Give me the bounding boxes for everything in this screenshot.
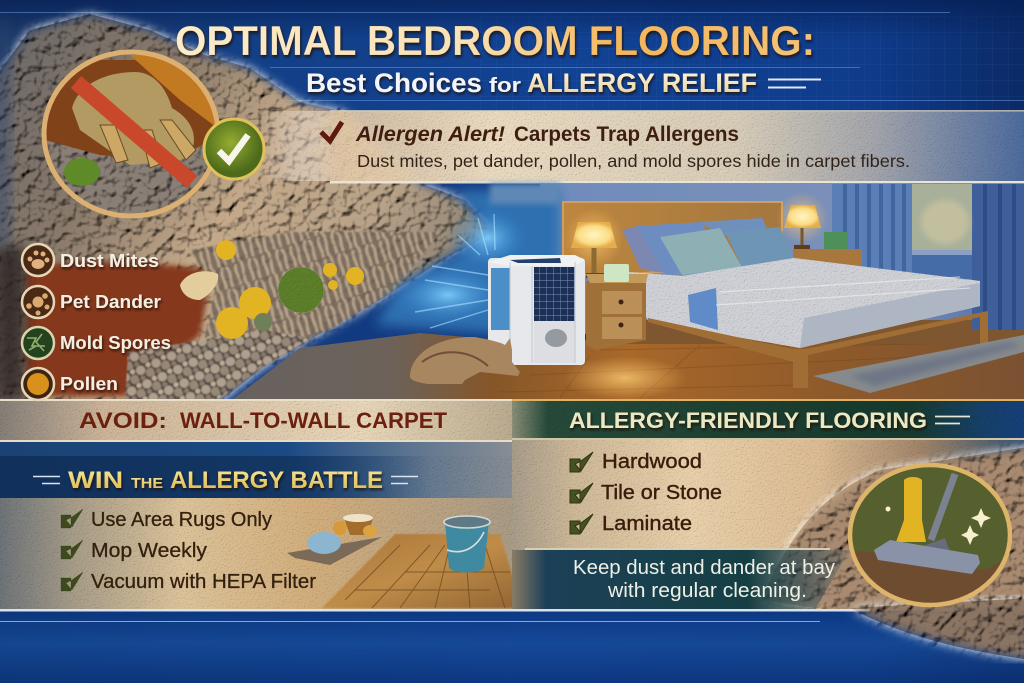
- checklist: cleaning tips: Vacuum with HEPA Filter: [91, 570, 316, 593]
- avoid text: AVOID:: [79, 408, 167, 433]
- alert heading: Allergen Alert!: [355, 123, 505, 146]
- tissue box right: [824, 232, 848, 249]
- header subtitle: Best Choices: [306, 68, 482, 98]
- carpet texture panel: [0, 14, 495, 405]
- panel heading: THE: [131, 475, 163, 492]
- icon: bucket: [444, 516, 490, 572]
- circular inset: vacuum cleaning: [848, 463, 1012, 610]
- icon: red check: [321, 122, 342, 141]
- icon: vacuum: [931, 474, 955, 540]
- checklist: flooring: Tile or Stone: [601, 481, 722, 504]
- mattress: [629, 258, 980, 348]
- tissue box left: [604, 264, 629, 282]
- bottom band: [0, 598, 1024, 683]
- legend item: mold spores: Mold Spores: [60, 332, 171, 353]
- panel heading: [68, 467, 383, 494]
- pillows: [622, 218, 794, 275]
- icon: soap tray: [287, 514, 382, 565]
- icon: green check badge: [204, 119, 264, 179]
- right lamp: [776, 192, 828, 249]
- mold clump: [278, 267, 324, 313]
- circular inset: dust mite: [43, 52, 264, 220]
- prohibition bar: [76, 82, 192, 182]
- checklist: cleaning tips: [61, 508, 316, 593]
- bedroom scene: [232, 184, 1024, 400]
- alert heading: Carpets Trap Allergens: [514, 123, 739, 146]
- checklist: cleaning tips: Mop Weekly: [91, 539, 208, 562]
- header subtitle: [306, 68, 757, 98]
- header subtitle: ALLERGY RELIEF: [527, 68, 757, 98]
- cat: [410, 337, 520, 384]
- legend item: mold spores: [22, 327, 171, 359]
- legend item: pet dander: [22, 286, 161, 318]
- floor: [232, 333, 1024, 400]
- right nightstand: [793, 249, 862, 266]
- panel heading: ALLERGY BATTLE: [170, 467, 383, 494]
- header subtitle: for: [489, 75, 521, 97]
- flooring heading band: [512, 399, 1024, 440]
- legend item: dust mites: Dust Mites: [60, 250, 159, 271]
- rug: [813, 335, 1024, 393]
- mite body: [72, 72, 194, 165]
- checklist: flooring: [570, 450, 722, 535]
- blue air glow: [375, 190, 560, 338]
- cleaning note: [512, 548, 850, 610]
- flooring options panel: [512, 440, 1024, 650]
- curtains: [832, 184, 1024, 330]
- header title: OPTIMAL BEDROOM FLOORING:: [175, 17, 815, 64]
- checklist: flooring: Laminate: [602, 512, 692, 535]
- cleaning note: Keep dust and dander at bay: [573, 557, 835, 579]
- allergen alert banner: [262, 110, 1024, 184]
- alert description: Dust mites, pet dander, pollen, and mold spores hide in carpet fibers.: [357, 151, 910, 171]
- checklist: cleaning tips: Use Area Rugs Only: [91, 508, 273, 531]
- icon: tiny mite: [180, 271, 218, 300]
- left lamp: [564, 208, 624, 278]
- header accent lines: [768, 80, 821, 88]
- carpet edge: [760, 445, 1024, 650]
- reddish fibre base: [26, 262, 212, 396]
- allergen legend: [22, 244, 171, 400]
- air purifier: [488, 255, 585, 365]
- wall: [540, 184, 1024, 334]
- left nightstand: [586, 274, 648, 350]
- carpet fibres and allergens: [125, 232, 440, 400]
- avoid text: WALL-TO-WALL CARPET: [180, 408, 447, 433]
- checklist: flooring: Hardwood: [602, 450, 702, 473]
- avoid band: [0, 399, 520, 442]
- legend item: pollen: [22, 368, 118, 400]
- header band: [0, 0, 1024, 112]
- air purifier burst: [388, 206, 530, 328]
- wood floor: [322, 534, 522, 608]
- panel heading: WIN: [68, 467, 123, 494]
- headboard: [563, 202, 782, 275]
- bed frame: [648, 311, 988, 388]
- icon: yellow brush: [896, 477, 926, 542]
- legend item: dust mites: [22, 244, 159, 276]
- flooring heading: ALLERGY-FRIENDLY FLOORING: [569, 408, 927, 433]
- legend item: pet dander: Pet Dander: [60, 291, 161, 312]
- win the allergy battle panel: [0, 442, 522, 610]
- legend item: pollen: Pollen: [60, 373, 118, 394]
- cleaning note: with regular cleaning.: [607, 580, 807, 602]
